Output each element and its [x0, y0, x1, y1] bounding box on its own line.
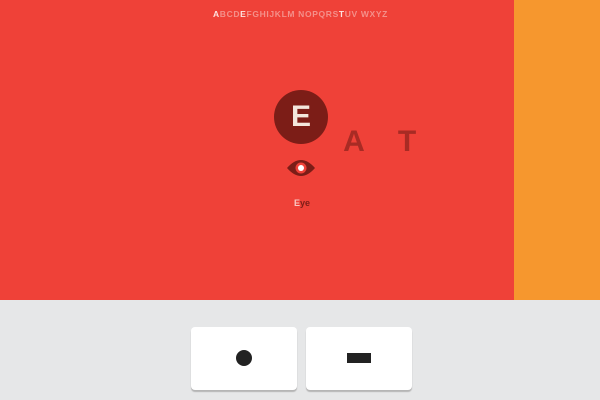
alphabet strip: ABCDEFGHIJKLM NOPQRSTUV WXYZ — [213, 9, 388, 19]
card: dot — [191, 327, 297, 390]
letter T: T — [398, 125, 416, 158]
letter A: A — [343, 125, 365, 158]
panel: orange side — [514, 0, 600, 300]
icon: eye — [287, 160, 315, 176]
panel: red main area — [0, 0, 514, 300]
letter circle E — [274, 90, 328, 144]
letter circle E: E — [291, 100, 311, 133]
card: dash — [306, 327, 412, 390]
label: Eye: Eye — [294, 198, 310, 208]
